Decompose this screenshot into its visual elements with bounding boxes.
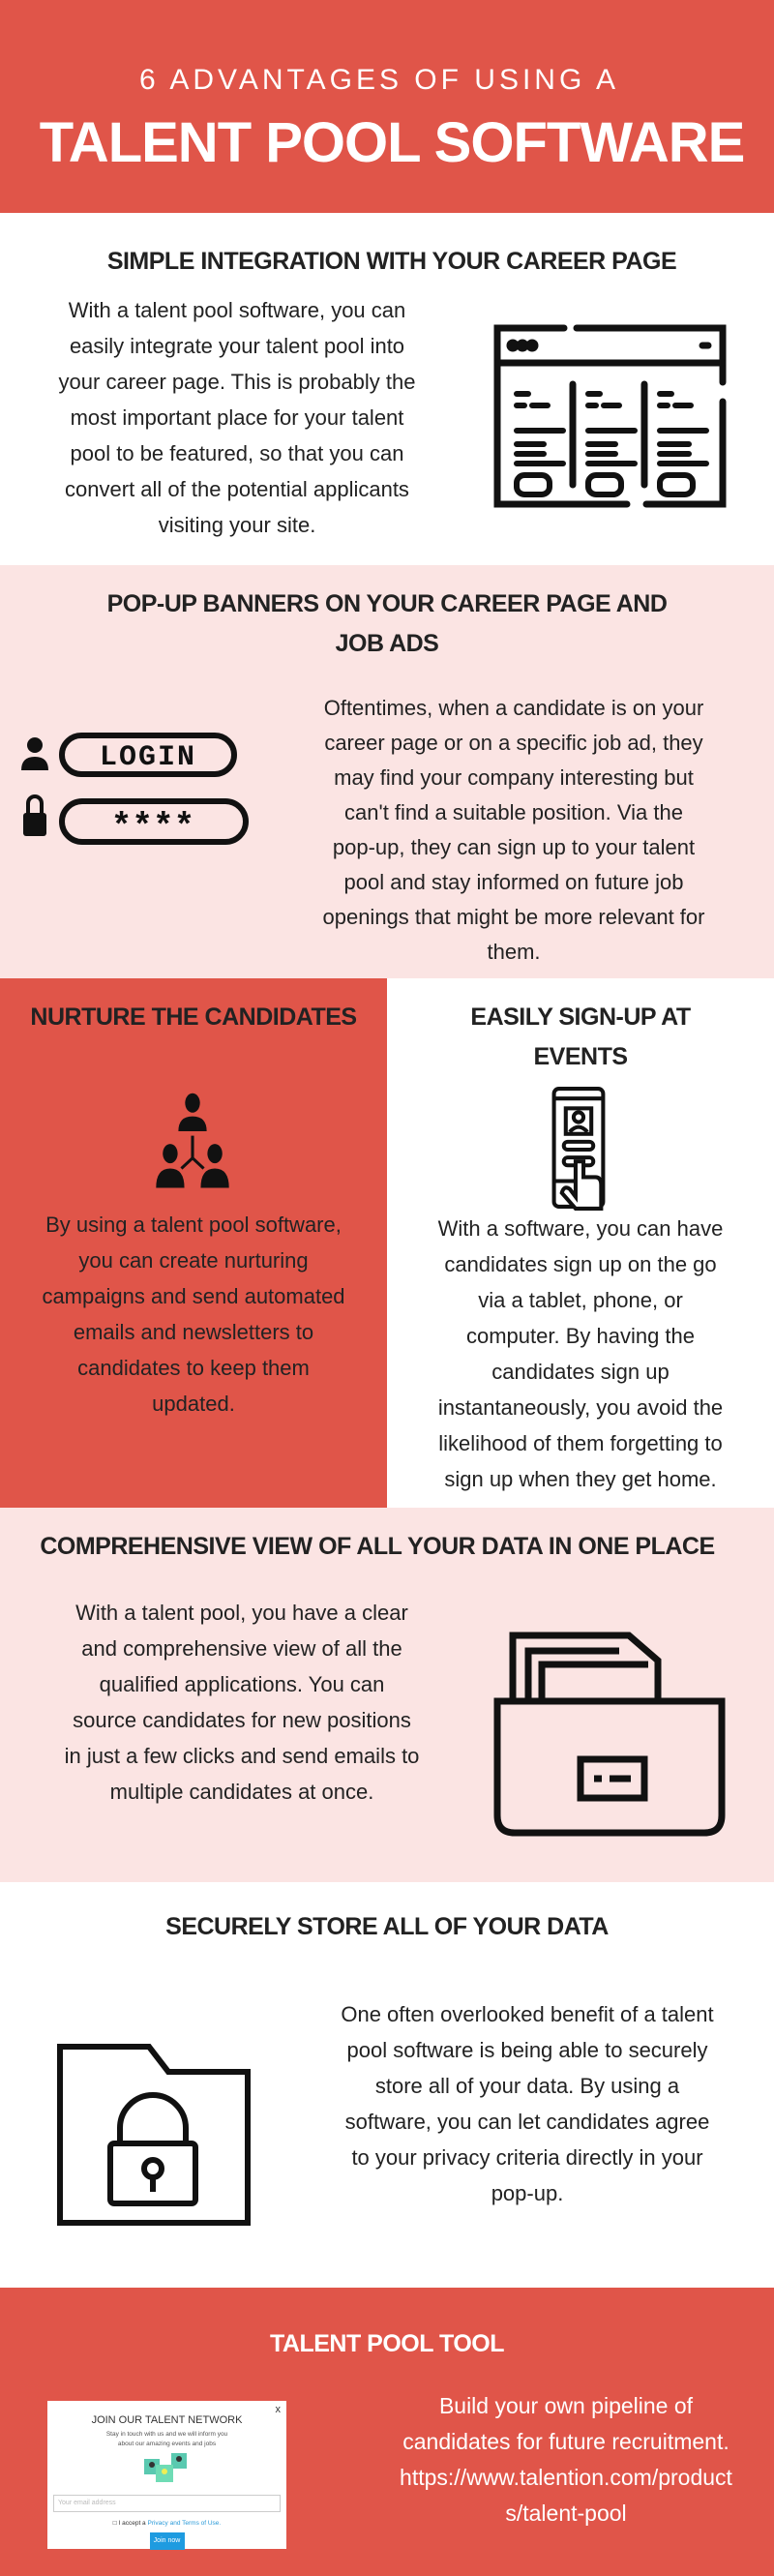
text block: pool to be featured, so that you can — [71, 441, 403, 465]
panel: simple integration — [0, 213, 774, 565]
text block: and comprehensive view of all the — [81, 1636, 402, 1661]
text block — [400, 2393, 732, 2526]
popup screenshot: x — [275, 2404, 281, 2415]
panel: comprehensive view — [0, 1508, 774, 1882]
text block: With a talent pool, you have a clear — [75, 1601, 408, 1625]
icon: login: **** — [111, 807, 194, 847]
text block: pop-up, they can sign up to your talent — [333, 835, 695, 859]
icon: login: LOGIN — [100, 741, 196, 774]
popup screenshot: Join now — [154, 2537, 180, 2544]
text block: instantaneously, you avoid the — [438, 1395, 723, 1420]
text block — [42, 1213, 345, 1416]
text block — [65, 1601, 419, 1804]
text block: With a software, you can have — [438, 1216, 723, 1241]
text block: candidates to keep them — [77, 1356, 310, 1380]
footer: talent pool tool — [0, 2288, 774, 2576]
text block: s/talent-pool — [505, 2501, 627, 2526]
text block: updated. — [152, 1392, 235, 1416]
text block: via a tablet, phone, or — [478, 1288, 683, 1312]
heading: JOB ADS — [336, 630, 438, 657]
text block: openings that might be more relevant for — [322, 905, 704, 929]
text block: pool and stay informed on future job — [343, 870, 683, 894]
text block: computer. By having the — [466, 1324, 695, 1348]
text block: visiting your site. — [159, 513, 315, 537]
text block: them. — [487, 940, 541, 964]
header banner — [0, 0, 774, 213]
popup screenshot — [47, 2401, 286, 2549]
popup screenshot: JOIN OUR TALENT NETWORK — [92, 2414, 242, 2426]
text block: pool software is being able to securely — [346, 2038, 708, 2062]
text block: Oftentimes, when a candidate is on your — [324, 696, 703, 720]
heading: POP-UP BANNERS ON YOUR CAREER PAGE AND — [107, 590, 667, 617]
heading — [107, 590, 667, 657]
icon: folder with lock — [57, 2044, 251, 2226]
text block: One often overlooked benefit of a talent — [341, 2002, 714, 2026]
heading: COMPREHENSIVE VIEW OF ALL YOUR DATA IN ONE PLACE — [40, 1533, 715, 1560]
text block: store all of your data. By using a — [375, 2074, 679, 2098]
heading: SECURELY STORE ALL OF YOUR DATA — [165, 1913, 609, 1940]
text block: likelihood of them forgetting to — [438, 1431, 723, 1455]
heading: NURTURE THE CANDIDATES — [30, 1003, 357, 1031]
text block: https://www.talention.com/product — [400, 2465, 732, 2490]
icon: phone with hand — [551, 1087, 606, 1211]
icon: login — [21, 733, 249, 847]
icon: network of people — [156, 1093, 229, 1188]
popup screenshot: about our amazing events and jobs — [118, 2441, 216, 2447]
text block: your career page. This is probably the — [59, 370, 415, 394]
panel: securely store — [0, 1882, 774, 2288]
text block: qualified applications. You can — [100, 1672, 384, 1696]
text block: sign up when they get home. — [444, 1467, 717, 1491]
text block: easily integrate your talent pool into — [70, 334, 404, 358]
text block: can't find a suitable position. Via the — [344, 800, 683, 824]
text block: to your privacy criteria directly in your — [351, 2145, 703, 2170]
text block: may find your company interesting but — [334, 765, 694, 790]
text block: in just a few clicks and send emails to — [65, 1744, 419, 1768]
text block — [341, 2002, 714, 2205]
icon: file folder — [493, 1632, 726, 1837]
text block: candidates sign up — [491, 1360, 670, 1384]
text block: software, you can let candidates agree — [345, 2110, 709, 2134]
text block: multiple candidates at once. — [110, 1780, 373, 1804]
text block: candidates for future recruitment. — [402, 2429, 729, 2454]
heading: EASILY SIGN-UP AT — [470, 1003, 691, 1031]
text block: you can create nurturing — [78, 1248, 309, 1273]
popup screenshot: Stay in touch with us and we will inform you — [106, 2431, 227, 2438]
text block: With a talent pool software, you can — [69, 298, 405, 322]
heading — [470, 1003, 691, 1070]
text block: candidates sign up on the go — [444, 1252, 717, 1276]
text block — [437, 1216, 723, 1491]
popup screenshot: Your email address — [58, 2500, 116, 2506]
text block: pop-up. — [491, 2181, 563, 2205]
heading: SIMPLE INTEGRATION WITH YOUR CAREER PAGE — [107, 248, 676, 275]
text block: source candidates for new positions — [73, 1708, 411, 1732]
popup screenshot: □ I accept a Privacy and Terms of Use. — [113, 2520, 221, 2527]
text block: By using a talent pool software, — [45, 1213, 342, 1237]
text block: emails and newsletters to — [74, 1320, 313, 1344]
icon: browser page — [493, 325, 726, 507]
text block: most important place for your talent — [71, 405, 403, 430]
text block: career page or on a specific job ad, they — [324, 731, 703, 755]
text block: convert all of the potential applicants — [65, 477, 409, 501]
text block: Build your own pipeline of — [439, 2393, 693, 2418]
text block: campaigns and send automated — [42, 1284, 345, 1308]
panel: easily sign-up at events — [387, 978, 774, 1508]
heading: EVENTS — [533, 1043, 628, 1070]
text block — [58, 298, 415, 537]
panel: pop-up banners — [0, 565, 774, 978]
heading: TALENT POOL TOOL — [270, 2330, 504, 2357]
panel: nurture the candidates — [0, 978, 387, 1508]
text block — [322, 696, 704, 964]
subtitle: 6 ADVANTAGES OF USING A — [139, 64, 619, 96]
title: TALENT POOL SOFTWARE — [40, 111, 744, 174]
